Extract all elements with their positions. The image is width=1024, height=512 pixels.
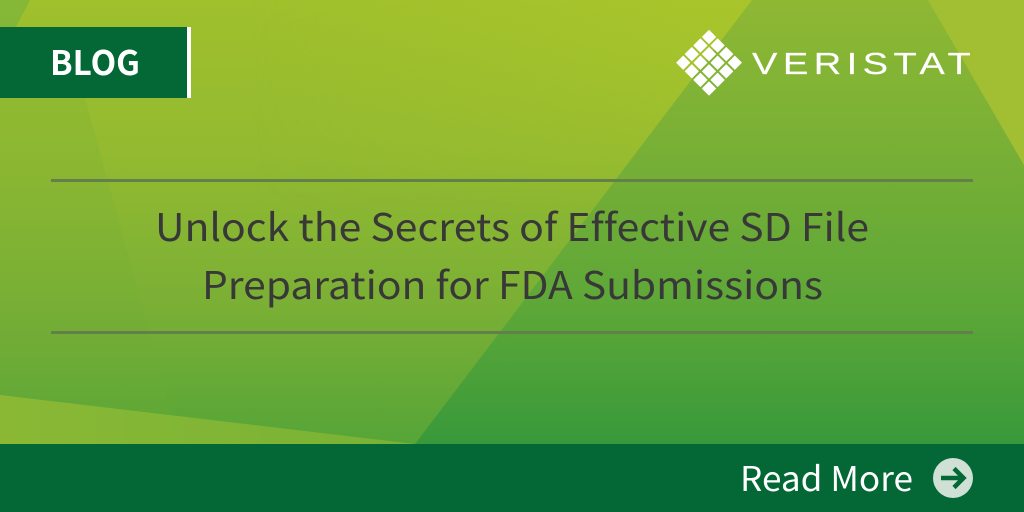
divider top [51,179,973,182]
background [0,0,752,444]
read more label: Read More [740,452,913,501]
icon: arrow circle [933,458,973,498]
logo: Veristat [677,30,971,95]
icon: diamond grid [677,30,741,95]
title [155,197,869,310]
wordmark: VERISTAT [752,47,971,81]
background triangle [415,0,1024,444]
title: Preparation for FDA Submissions [202,255,823,310]
top right corner [928,0,1024,165]
divider bottom [51,331,973,334]
badge: blog: BLOG [50,36,140,85]
badge: blog [0,27,191,98]
title: Unlock the Secrets of Effective SD File [155,197,869,252]
footer bar [0,444,1024,512]
